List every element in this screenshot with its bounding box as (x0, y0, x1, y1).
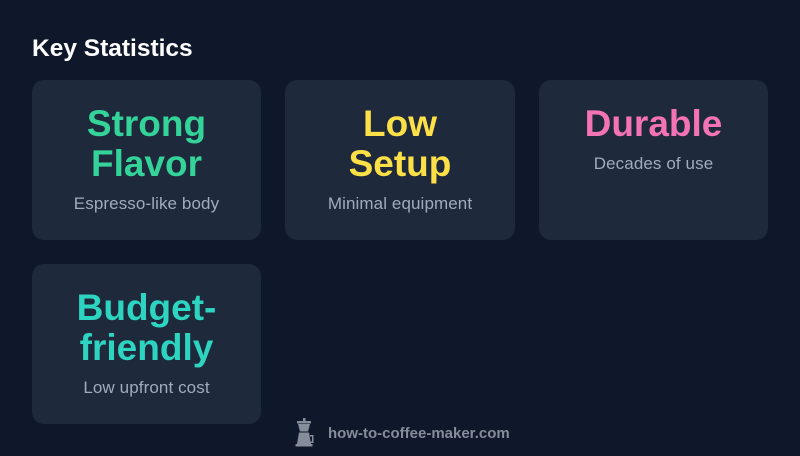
caption: espresso-like body: Espresso-like body (74, 194, 219, 213)
stat: low setup: Setup (349, 143, 451, 184)
stat: strong flavor: Strong (87, 103, 206, 144)
panel: low setup (285, 80, 515, 240)
caption: minimal equipment: Minimal equipment (328, 194, 472, 213)
stat: budget-friendly (77, 287, 216, 368)
panel: budget-friendly (32, 264, 261, 424)
stat: strong flavor: Flavor (91, 143, 202, 184)
stat: low setup: Low (363, 103, 437, 144)
panel: durable (539, 80, 768, 240)
panel: strong flavor (32, 80, 261, 240)
stat: budget-friendly: Budget- (77, 287, 216, 328)
stat: durable: Durable (585, 103, 722, 144)
caption: low upfront cost: Low upfront cost (83, 378, 210, 397)
stat: strong flavor (87, 103, 206, 184)
stat: low setup (349, 103, 451, 184)
footer: website: how-to-coffee-maker.com (328, 425, 510, 442)
icon: moka pot (296, 418, 314, 446)
stat: budget-friendly: friendly (80, 327, 213, 368)
caption: decades of use: Decades of use (594, 154, 713, 173)
title: Key Statistics (32, 35, 193, 62)
